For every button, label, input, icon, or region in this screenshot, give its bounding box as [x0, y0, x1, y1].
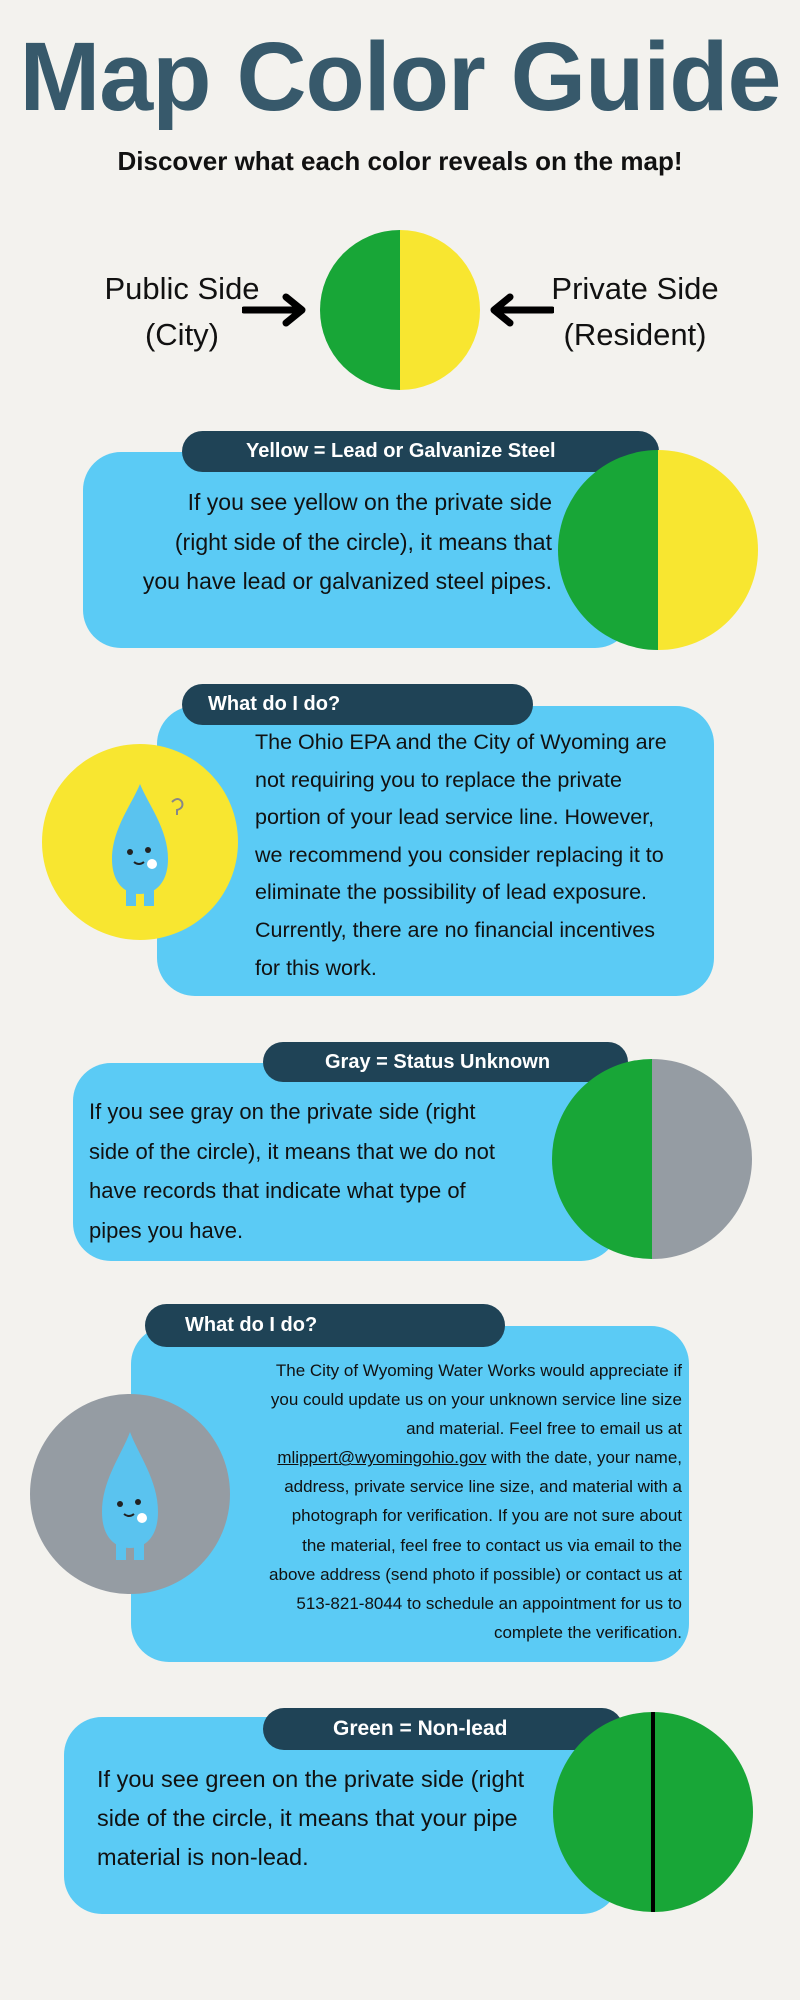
box [83, 452, 633, 648]
text: side of the circle, it means that your pipe [97, 1805, 518, 1831]
text: side of the circle), it means that we do not [89, 1138, 495, 1164]
text: If you see gray on the private side (right [89, 1099, 475, 1124]
box [64, 1717, 620, 1914]
panel: what do I do (yellow) [42, 684, 714, 996]
panel: green [64, 1708, 753, 1914]
text [269, 1361, 682, 1642]
box [131, 1326, 689, 1662]
arrow: right [242, 294, 306, 326]
top circle [320, 230, 480, 390]
text: portion of your lead service line. However, [255, 805, 654, 829]
text: 513-821-8044 to schedule an appointment for us to [296, 1594, 682, 1613]
label: private side [551, 271, 719, 352]
heading pill [263, 1042, 628, 1082]
text [89, 1099, 495, 1242]
heading pill: What do I do? [185, 1314, 317, 1336]
label: public side [104, 271, 260, 352]
panel: what do I do (gray) [30, 1304, 689, 1662]
text: The Ohio EPA and the City of Wyoming are [255, 730, 667, 754]
panel: yellow [83, 431, 758, 650]
text: address, private service line size, and material with a [284, 1477, 682, 1496]
subtitle: Discover what each color reveals on the map! [118, 146, 682, 176]
text: eliminate the possibility of lead exposure. [255, 880, 647, 904]
label: private side: Private Side [551, 271, 719, 306]
text: mlippert@wyomingohio.gov with the date, your name, [277, 1448, 682, 1467]
text: Currently, there are no financial incentives [255, 918, 655, 942]
circle [552, 1059, 752, 1259]
text: the material, feel free to contact us via email to the [302, 1536, 682, 1555]
heading pill [182, 684, 533, 725]
title: Map Color Guide [20, 22, 780, 131]
label: public side: (City) [145, 317, 219, 352]
icon: yellow circle with mascot [42, 744, 238, 940]
text: material is non-lead. [97, 1844, 309, 1870]
panel: gray [73, 1042, 752, 1261]
text: The City of Wyoming Water Works would appreciate if [276, 1361, 682, 1380]
heading pill [263, 1708, 623, 1750]
heading pill: What do I do? [208, 693, 340, 715]
text: complete the verification. [494, 1623, 682, 1642]
label: private side: (Resident) [564, 317, 706, 352]
circle [553, 1712, 753, 1912]
heading pill: Gray = Status Unknown [325, 1051, 550, 1073]
text: pipes you have. [89, 1218, 243, 1242]
text: and material. Feel free to email us at [406, 1419, 682, 1438]
text: above address (send photo if possible) or contact us at [269, 1565, 682, 1584]
text: you have lead or galvanized steel pipes. [143, 568, 552, 594]
heading pill [182, 431, 659, 472]
text: If you see yellow on the private side [188, 489, 552, 515]
text: for this work. [255, 956, 377, 980]
text: we recommend you consider replacing it to [255, 843, 664, 867]
box [157, 706, 714, 996]
text [97, 1766, 524, 1870]
text: not requiring you to replace the private [255, 768, 622, 792]
text: If you see green on the private side (right [97, 1766, 524, 1792]
text [255, 730, 667, 980]
text: (right side of the circle), it means that [175, 528, 552, 554]
text: you could update us on your unknown service line size [271, 1390, 682, 1409]
text: have records that indicate what type of [89, 1178, 466, 1203]
heading pill: Yellow = Lead or Galvanize Steel [246, 440, 556, 462]
heading pill [145, 1304, 505, 1347]
text: photograph for verification. If you are not sure about [292, 1506, 682, 1525]
icon: gray circle with mascot [30, 1394, 230, 1594]
label: public side: Public Side [104, 271, 260, 306]
heading pill: Green = Non-lead [333, 1717, 507, 1740]
text [143, 489, 552, 594]
circle [558, 450, 758, 650]
arrow: left [490, 294, 554, 326]
box [73, 1063, 619, 1261]
